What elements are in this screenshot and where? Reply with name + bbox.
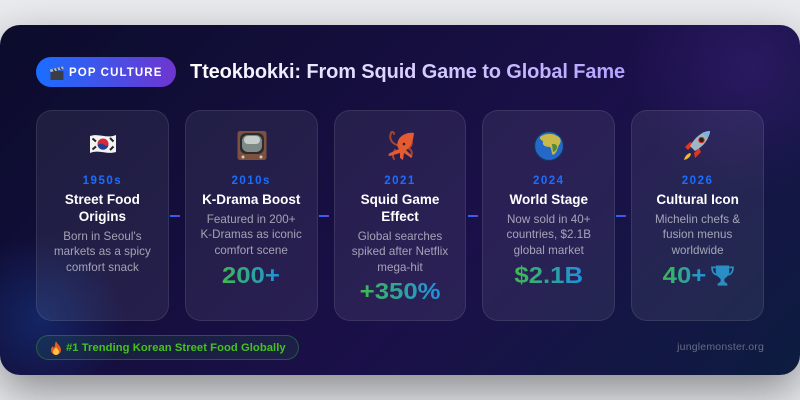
panel: 2021 squid game effect	[334, 110, 466, 320]
stat: 40+	[663, 262, 706, 288]
card heading: Squid Game	[361, 192, 439, 206]
description: markets as a spicy	[54, 245, 151, 258]
icon: fire	[51, 341, 61, 355]
description: mega-hit	[377, 261, 423, 274]
description: global market	[514, 244, 584, 257]
year: 2024	[533, 174, 565, 186]
description: Featured in 200+	[207, 212, 296, 226]
description: Now sold in 40+	[507, 212, 591, 226]
icon: clapperboard	[50, 66, 64, 80]
stat: 200+	[222, 262, 280, 288]
icon: trophy	[711, 266, 734, 286]
badge label: POP CULTURE	[69, 67, 162, 79]
description: spiked after Netflix	[352, 245, 448, 258]
icon: globe	[534, 131, 564, 161]
icon: rocket	[684, 131, 710, 160]
tag label: #1 Trending Korean Street Food Globally	[66, 342, 286, 354]
description	[655, 212, 740, 257]
card heading: Effect	[381, 208, 419, 224]
description	[506, 212, 591, 257]
description: worldwide	[672, 244, 724, 257]
stat: +350%	[360, 278, 440, 304]
category badge	[36, 57, 176, 87]
description: comfort snack	[66, 261, 139, 274]
card heading: K-Drama Boost	[202, 192, 300, 206]
connector arrow	[468, 215, 478, 217]
card heading: Origins	[79, 208, 126, 224]
description: comfort scene	[214, 244, 288, 257]
connector arrow	[616, 215, 626, 217]
card heading: Cultural Icon	[656, 192, 739, 206]
card heading	[65, 192, 140, 224]
year: 2021	[384, 174, 416, 186]
icon: squid	[388, 130, 414, 160]
panel: 2024 world stage	[482, 110, 615, 320]
trending tag	[36, 335, 299, 360]
panel: 1950s street food origins	[36, 110, 169, 320]
card heading	[361, 192, 439, 224]
source credit: junglemonster.org	[677, 341, 764, 353]
description: K-Dramas as iconic	[200, 228, 302, 241]
year: 2026	[682, 174, 713, 186]
panel: 2026 cultural icon	[631, 110, 764, 320]
connector arrow	[170, 215, 180, 217]
icon: South Korean flag	[90, 135, 116, 153]
description: fusion menus	[663, 228, 732, 241]
description	[54, 230, 151, 274]
description	[352, 230, 448, 274]
card heading: World Stage	[510, 192, 588, 206]
description: Global searches	[358, 230, 442, 242]
panel: 2010s k-drama boost	[185, 110, 318, 320]
icon: television	[238, 131, 266, 160]
description: countries, $2.1B	[506, 228, 591, 241]
connector arrow	[319, 215, 329, 217]
title: Tteokbokki: From Squid Game to Global Fame	[190, 61, 625, 83]
year: 1950s	[83, 174, 122, 186]
description: Born in Seoul's	[63, 230, 142, 242]
year: 2010s	[231, 174, 271, 186]
description: Michelin chefs &	[655, 212, 740, 226]
card heading: Street Food	[65, 192, 140, 206]
stat: $2.1B	[514, 262, 583, 288]
description	[200, 212, 302, 257]
